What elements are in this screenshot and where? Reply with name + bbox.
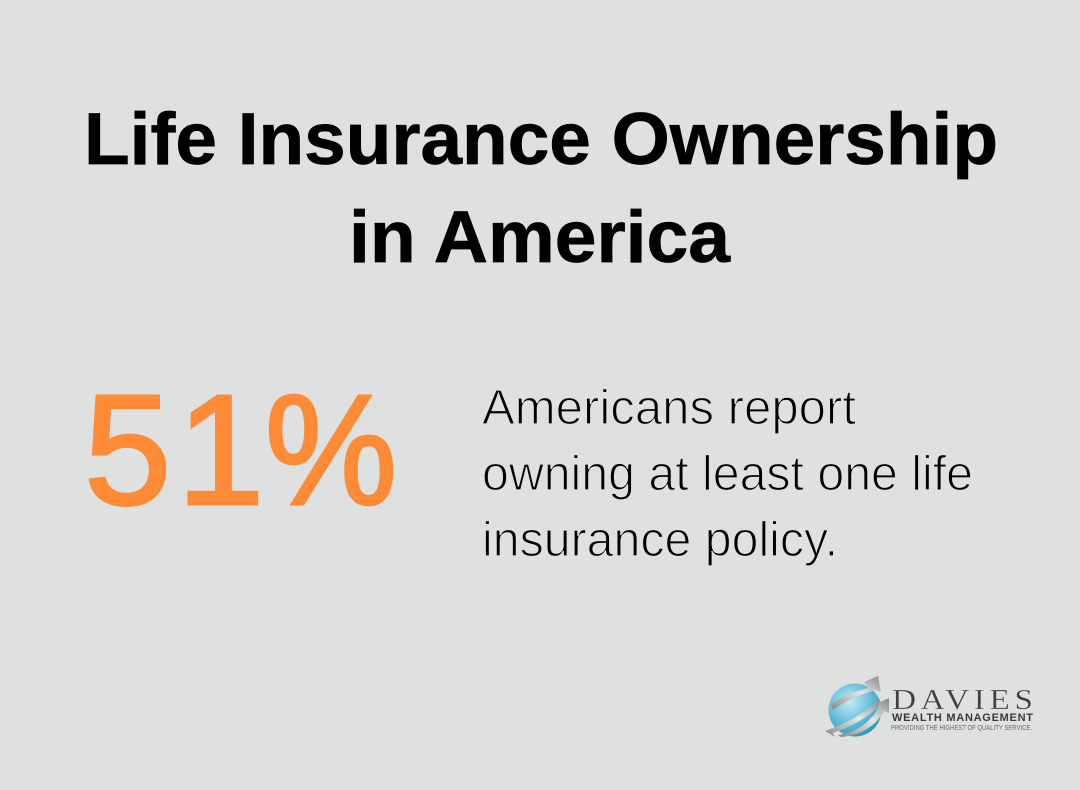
description text: insurance policy. [482,513,838,567]
description text: owning at least one life [482,447,973,501]
title: Life Insurance Ownership [84,99,998,180]
description text: Americans report [482,381,856,435]
title: in America [349,197,731,278]
logo subtitle: WEALTH MANAGEMENT [892,712,1033,724]
description text [482,381,973,567]
statistic: 51%: % [265,363,397,538]
logo tagline: PROVIDING THE HIGHEST OF QUALITY SERVICE. [891,725,1032,732]
icon: globe with arrows [825,676,889,737]
statistic: 51%: 51 [84,363,264,538]
title [84,99,998,278]
statistic: 51% [84,363,397,538]
logo wordmark: DAVIES [892,683,1033,715]
logo: Davies Wealth Management [825,676,1033,737]
